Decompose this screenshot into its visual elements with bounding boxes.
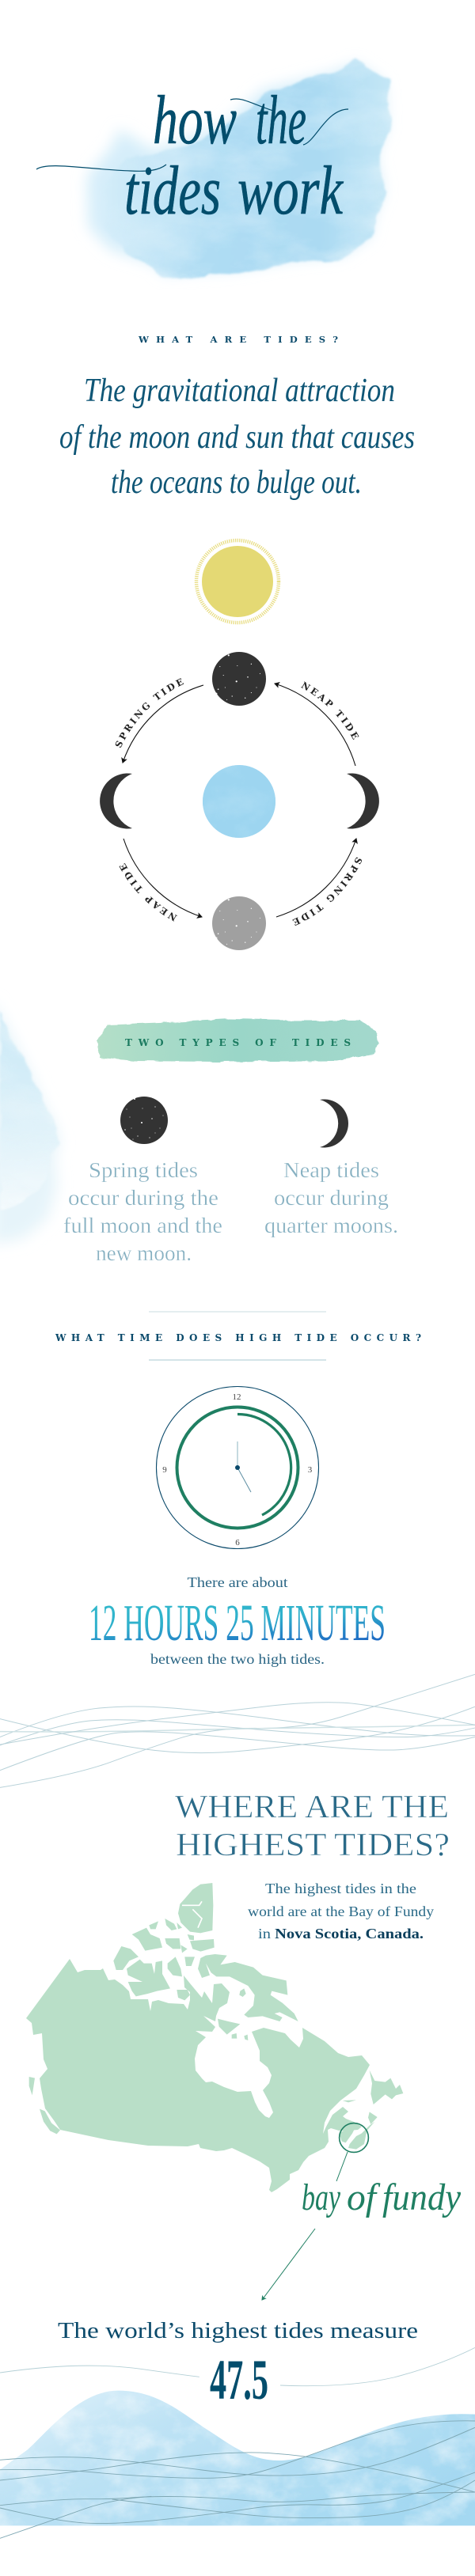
decorative wave lines bottom <box>0 2347 475 2538</box>
paragraph: highest tides location: world are at the Bay of Fundy <box>248 1904 434 1919</box>
arc labels: SPRING TIDE <box>116 678 184 748</box>
title: how the tides work <box>36 82 348 229</box>
Atlantic provinces <box>339 2070 403 2150</box>
bottom watercolor water <box>0 2391 475 2525</box>
heading: what time does high tide occur: WHAT TIME DOES HIGH TIDE OCCUR? <box>55 1332 421 1343</box>
clock: 12 <box>233 1392 241 1402</box>
neap tides text: Neap tides <box>283 1158 379 1182</box>
banner: two types of tides: TWO TYPES OF TIDES <box>125 1037 351 1048</box>
left watercolor wash <box>0 999 60 1244</box>
panel: neap tides <box>264 1100 398 1237</box>
diagram: moon cycle around earth <box>100 652 379 950</box>
icon: full moon top <box>212 652 266 706</box>
decorative wave lines <box>0 1674 475 1787</box>
heading: where are the highest tides: WHERE ARE THE <box>175 1788 449 1824</box>
arrow: neap tide lower left <box>124 839 202 917</box>
callout: bay of fundy <box>302 2123 462 2218</box>
icon: sun <box>196 540 279 623</box>
stat: 12 hours 25 minutes <box>89 1574 386 1667</box>
spring tides text: occur during the <box>68 1186 218 1210</box>
Vancouver and Haida Gwaii <box>29 2077 60 2134</box>
heading: where are the highest tides <box>175 1788 450 1862</box>
title watercolor wash <box>87 59 391 279</box>
heading: where are the highest tides: HIGHEST TIDES? <box>176 1826 450 1862</box>
icon: new moon bottom <box>212 896 266 950</box>
title: how the tides work: work <box>238 153 344 229</box>
heading: what are tides: WHAT ARE TIDES? <box>138 334 338 345</box>
callout: bay of fundy: fundy <box>382 2176 462 2218</box>
panel: spring tides <box>63 1097 222 1265</box>
map: Canada <box>26 1883 403 2192</box>
stat: 47.5: 47.5 <box>210 2348 268 2411</box>
icon: right crescent <box>347 774 379 829</box>
arrow: spring tide upper left <box>123 685 203 763</box>
arrow: spring tide lower right <box>276 839 356 917</box>
spring tides text: new moon. <box>96 1241 192 1265</box>
neap tides text: quarter moons. <box>264 1214 398 1237</box>
clock: 9 <box>162 1465 167 1475</box>
definition script text: The gravitational attraction <box>84 373 395 409</box>
icon: crescent moon <box>320 1100 348 1147</box>
title: how the tides work: tides <box>124 153 221 229</box>
definition script text <box>59 373 415 501</box>
spring tides text: full moon and the <box>63 1214 222 1237</box>
callout: bay of fundy: bay <box>302 2176 340 2218</box>
stat: 12 hours 25 minutes: between the two high tides. <box>150 1651 325 1667</box>
paragraph: highest tides location: in Nova Scotia, Canada. <box>258 1926 424 1941</box>
icon: earth <box>203 765 276 838</box>
title: how the tides work: the <box>256 82 306 159</box>
clock <box>157 1386 318 1549</box>
arc labels <box>116 678 362 926</box>
definition script text: of the moon and sun that causes <box>59 419 415 456</box>
text: world's highest tides measure: The world’s highest tides measure <box>58 2318 418 2343</box>
clock: 6 <box>235 1538 240 1547</box>
arc labels: NEAP TIDE <box>301 681 359 740</box>
paragraph: highest tides location: The highest tides in the <box>265 1881 416 1896</box>
neap tides text: occur during <box>274 1186 389 1210</box>
spring tides text: Spring tides <box>89 1158 198 1182</box>
arrow: bay of fundy to measure <box>262 2229 315 2300</box>
clock: 3 <box>308 1465 313 1475</box>
mainland <box>26 1959 370 2192</box>
arc labels: SPRING TIDE <box>292 858 362 926</box>
stat: 12 hours 25 minutes: There are about <box>187 1574 288 1590</box>
arrow: neap tide upper right <box>275 684 355 766</box>
arc labels: NEAP TIDE <box>119 863 177 922</box>
neap tides text <box>264 1158 398 1237</box>
arctic islands <box>113 1883 298 2040</box>
icon: full moon <box>120 1097 168 1144</box>
title: how the tides work: how <box>153 82 237 159</box>
paragraph: highest tides location <box>248 1881 434 1941</box>
banner: two types of tides <box>97 1019 378 1062</box>
callout: bay of fundy: of <box>347 2176 381 2218</box>
definition script text: the oceans to bulge out. <box>111 464 362 501</box>
icon: left crescent <box>100 774 132 829</box>
spring tides text <box>63 1158 222 1265</box>
